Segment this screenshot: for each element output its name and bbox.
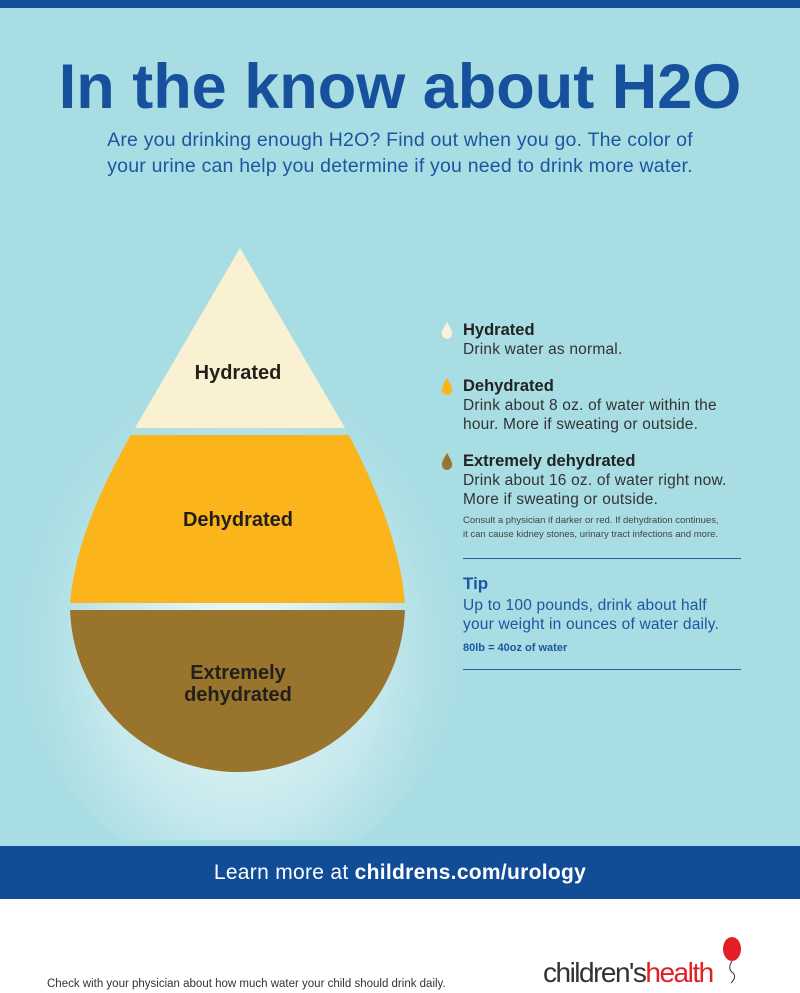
glow xyxy=(52,428,428,840)
subtitle: your urine can help you determine if you need to drink more water. xyxy=(107,155,693,177)
legend: dehydrated: Dehydrated xyxy=(463,377,554,395)
segment: extremely dehydrated xyxy=(70,610,405,772)
legend: dehydrated xyxy=(442,377,717,433)
logo: children'shealth xyxy=(543,957,713,988)
disclaimer: Check with your physician about how much water your child should drink daily. xyxy=(47,978,446,990)
legend: extremely dehydrated: it can cause kidney stones, urinary tract infections and more. xyxy=(463,529,718,540)
legend: hydrated: Hydrated xyxy=(463,321,535,339)
legend: extremely dehydrated: Extremely dehydrated xyxy=(463,452,635,470)
legend: extremely dehydrated: More if sweating or outside. xyxy=(463,491,658,508)
segment: hydrated xyxy=(135,248,345,428)
legend xyxy=(442,321,726,540)
tip box: your weight in ounces of water daily. xyxy=(463,616,719,633)
tip box: Tip xyxy=(463,574,488,593)
legend: extremely dehydrated: Drink about 16 oz. of water right now. xyxy=(463,472,726,489)
legend: extremely dehydrated: Consult a physician if darker or red. If dehydration continues, xyxy=(463,515,719,526)
drop chart xyxy=(70,248,405,772)
legend: dehydrated: Drink about 8 oz. of water within the xyxy=(463,397,717,414)
title: In the know about H2O xyxy=(59,52,741,122)
segment: extremely dehydrated: Extremely xyxy=(190,662,287,684)
legend: dehydrated: hour. More if sweating or outside. xyxy=(463,416,698,433)
legend: hydrated: Drink water as normal. xyxy=(463,341,622,358)
segment: extremely dehydrated: dehydrated xyxy=(184,684,292,706)
subtitle xyxy=(107,129,693,177)
subtitle: Are you drinking enough H2O? Find out when you go. The color of xyxy=(107,129,693,151)
segment: dehydrated xyxy=(70,435,405,603)
tip box: 80lb = 40oz of water xyxy=(463,642,567,654)
footer banner: Learn more at childrens.com/urology xyxy=(214,861,586,884)
tip box: Up to 100 pounds, drink about half xyxy=(463,597,707,614)
segment: hydrated: Hydrated xyxy=(195,362,281,384)
segment: dehydrated: Dehydrated xyxy=(183,509,293,531)
legend: extremely dehydrated xyxy=(442,452,726,540)
logo xyxy=(543,937,741,988)
footer banner xyxy=(0,846,800,899)
icon: balloon xyxy=(723,937,741,984)
legend: hydrated xyxy=(442,321,622,358)
tip box xyxy=(463,558,741,670)
